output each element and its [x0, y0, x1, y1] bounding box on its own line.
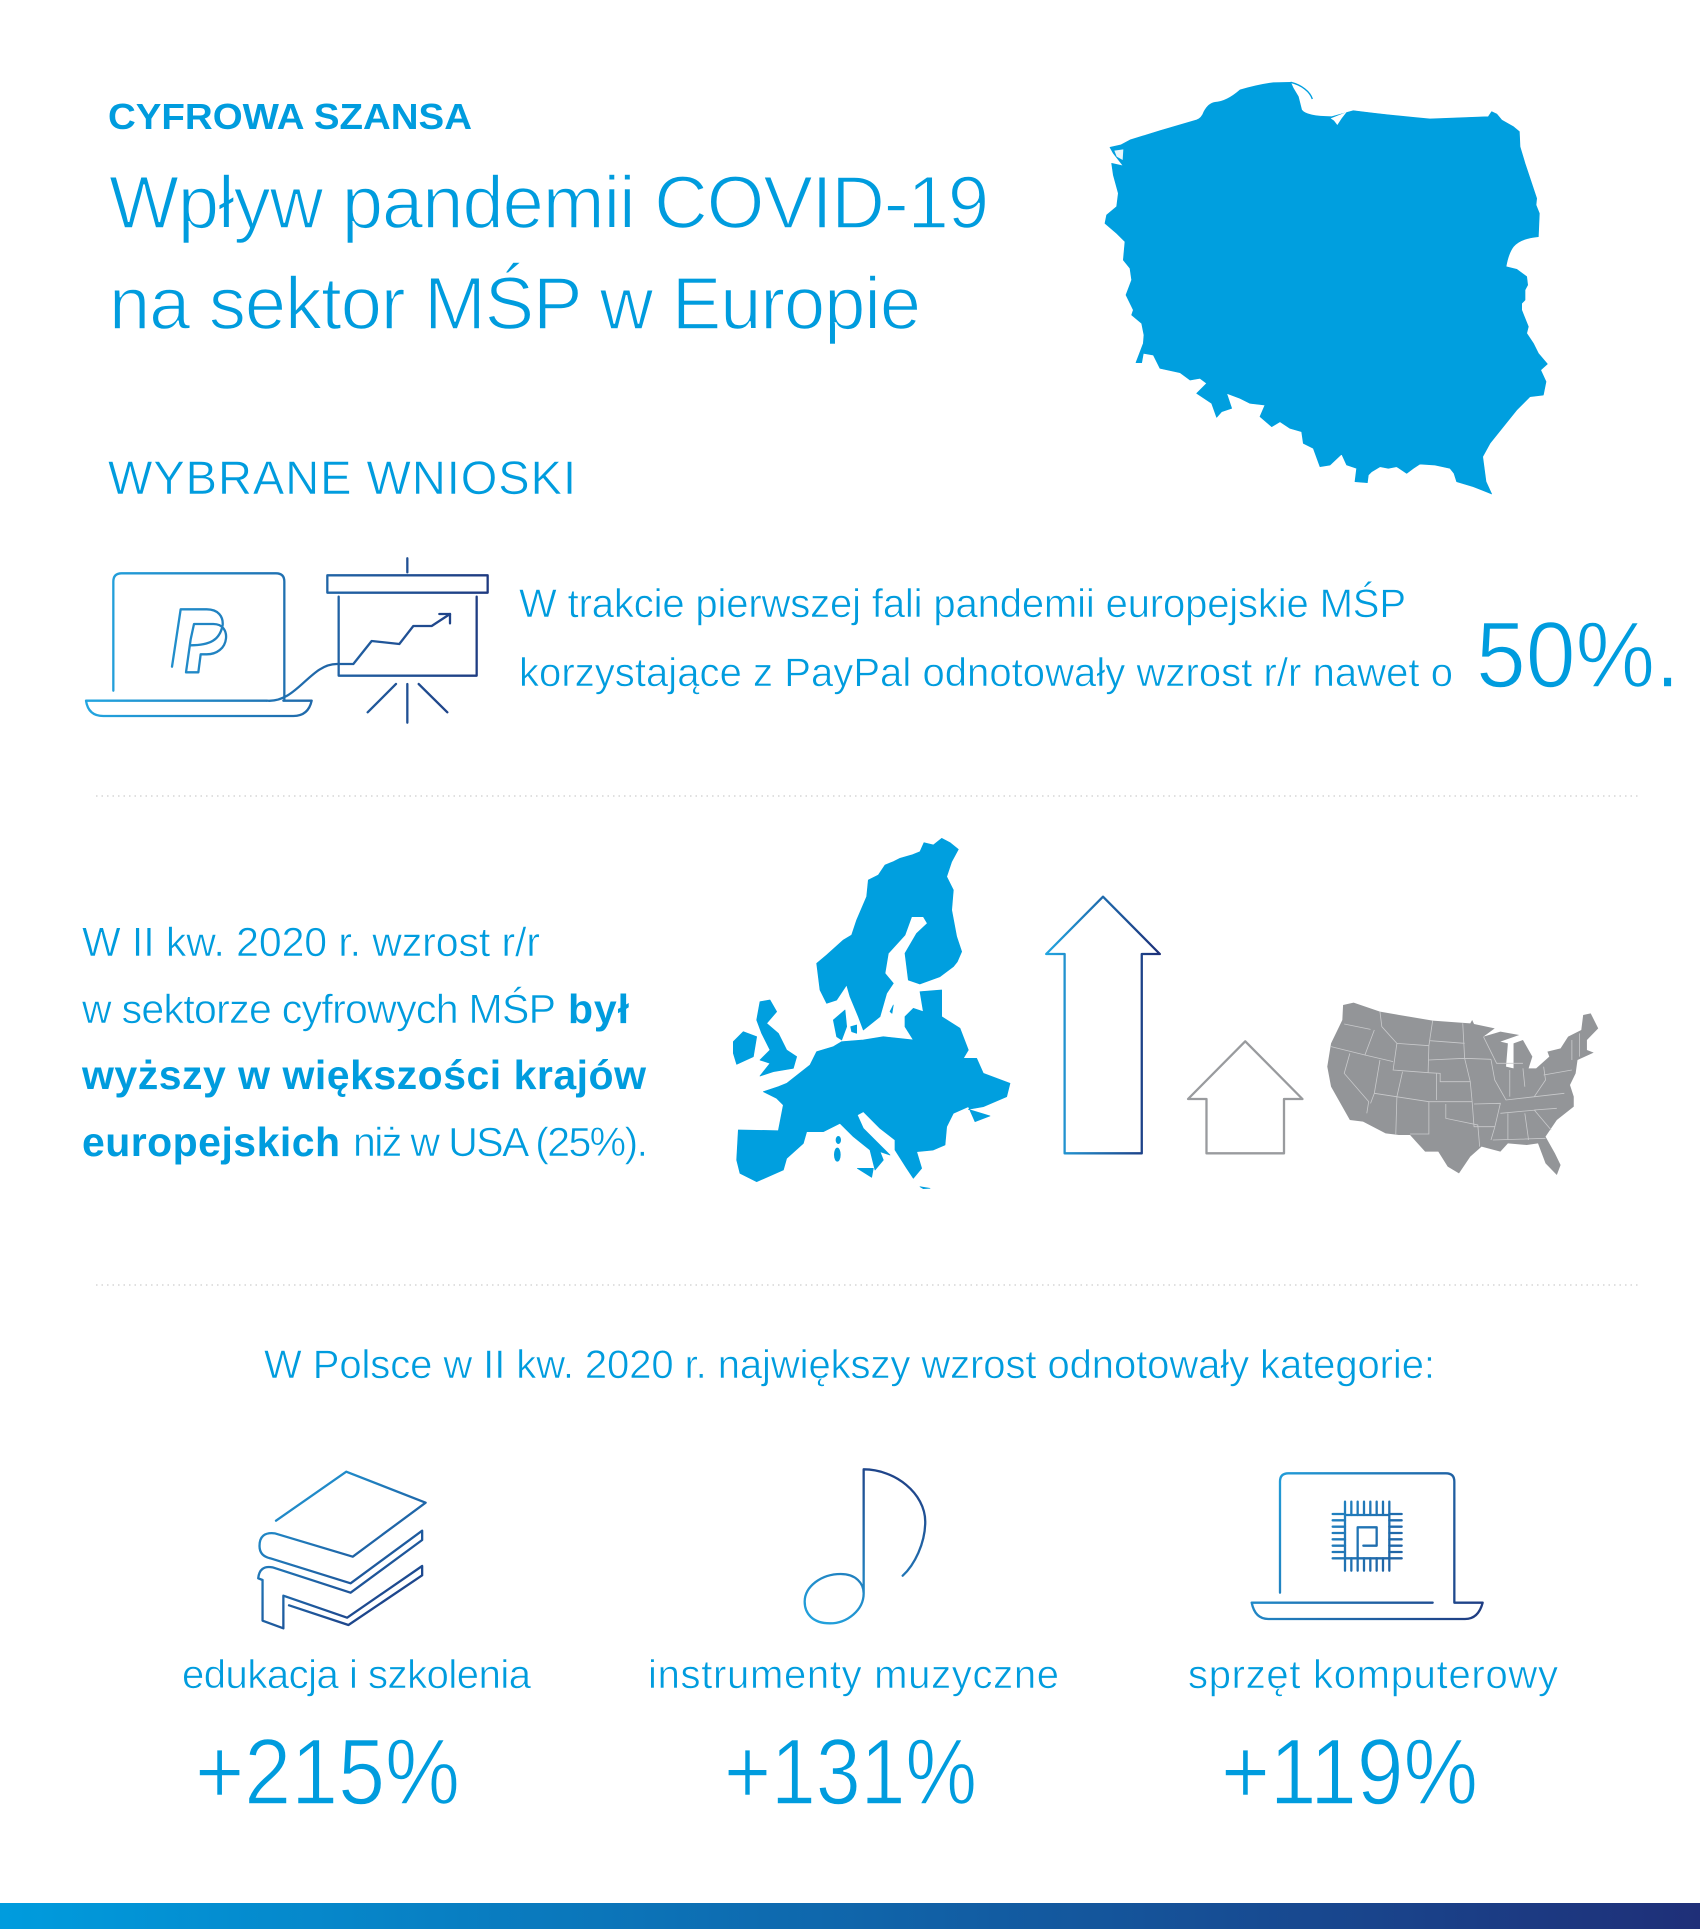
section heading: key findings: WYBRANE WNIOSKI: [108, 451, 576, 504]
text: second finding: był: [568, 986, 630, 1032]
title: [109, 161, 989, 345]
text: second finding: europejskich: [82, 1119, 340, 1165]
map: USA: [1327, 1003, 1598, 1175]
arrow: Europe growth: [1046, 897, 1160, 1153]
number: +131%: +131%: [724, 1719, 977, 1824]
big number: 50%: 50%.: [1476, 602, 1680, 707]
label: musical instruments: instrumenty muzyczne: [648, 1653, 1059, 1697]
text: first finding: W trakcie pierwszej fali pandemii europejskie MŚP: [519, 580, 1406, 626]
text: second finding: niż w USA (25%).: [353, 1119, 648, 1165]
number: +119%: +119%: [1221, 1719, 1478, 1824]
map: Poland: [1105, 82, 1547, 494]
text: second finding: W II kw. 2020 r. wzrost r/r: [82, 919, 540, 965]
number: +215%: +215%: [195, 1719, 460, 1824]
text: second finding: w sektorze cyfrowych MŚP: [81, 986, 556, 1032]
icon: music note: [805, 1469, 925, 1623]
panel: computer hardware: [1188, 1473, 1558, 1824]
section heading: categories in Poland: W Polsce w II kw. 2020 r. największy wzrost odnotowały kategorie:: [264, 1343, 1435, 1387]
text: first finding: [519, 580, 1453, 695]
label: computer hardware: sprzęt komputerowy: [1188, 1653, 1558, 1697]
title: na sektor MŚP w Europie: [109, 262, 921, 345]
arrow: USA growth: [1188, 1041, 1302, 1153]
panel: education: [182, 1472, 532, 1824]
text: second finding: [81, 919, 648, 1165]
map: Europe: [733, 838, 1010, 1189]
text: second finding: wyższy w większości krajów: [81, 1052, 646, 1098]
title: Wpływ pandemii COVID-19: [109, 161, 989, 244]
icon: laptop with PayPal logo connected to growth chart: [86, 558, 488, 723]
text: first finding: korzystające z PayPal odnotowały wzrost r/r nawet o: [519, 651, 1453, 695]
panel: musical instruments: [648, 1469, 1059, 1824]
label: education: edukacja i szkolenia: [182, 1653, 532, 1697]
icon: laptop with chip: [1252, 1473, 1483, 1619]
icon: books: [258, 1472, 426, 1628]
footer gradient bar: [0, 1903, 1700, 1929]
eyebrow heading: CYFROWA SZANSA: [108, 96, 472, 137]
